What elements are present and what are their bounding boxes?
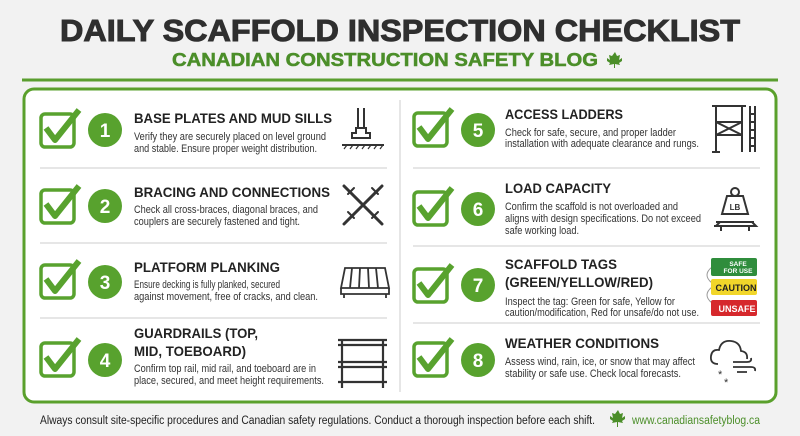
- item 5: 5: [473, 121, 484, 142]
- item 3: 3: [100, 273, 110, 294]
- item 6: safe working load.: [505, 225, 579, 237]
- item 1: BASE PLATES AND MUD SILLS: [134, 110, 332, 126]
- item 8: stability or safe use. Check local forecasts.: [505, 368, 681, 380]
- item 2: [41, 184, 382, 228]
- item 7: (GREEN/YELLOW/RED): [505, 274, 653, 290]
- item 5: Check for safe, secure, and proper ladder: [505, 127, 676, 139]
- item 8: *: [724, 377, 729, 389]
- item 3: against movement, free of cracks, and clean.: [134, 291, 318, 303]
- title: DAILY SCAFFOLD INSPECTION CHECKLIST: [60, 13, 740, 48]
- item 4: MID, TOEBOARD): [134, 343, 246, 359]
- item 7: 7: [473, 276, 483, 297]
- item 8: [414, 335, 755, 389]
- item 4: [41, 325, 387, 388]
- item 7: [414, 256, 757, 319]
- item 8: WEATHER CONDITIONS: [505, 335, 659, 351]
- item 6: [414, 180, 756, 237]
- footer url: www.canadiansafetyblog.ca: [631, 415, 761, 427]
- item 8: Assess wind, rain, ice, or snow that may affect: [505, 356, 695, 368]
- item 6: Confirm the scaffold is not overloaded and: [505, 201, 678, 213]
- item 7: Inspect the tag: Green for safe, Yellow for: [505, 296, 675, 308]
- item 1: and stable. Ensure proper weight distribution.: [134, 143, 317, 155]
- item 8: *: [718, 369, 723, 381]
- item 6: LOAD CAPACITY: [505, 180, 612, 196]
- item 2: 2: [100, 197, 110, 218]
- item 7: SCAFFOLD TAGS: [505, 256, 617, 272]
- item 4: GUARDRAILS (TOP,: [134, 325, 258, 341]
- item 3: PLATFORM PLANKING: [134, 259, 280, 275]
- item 4: Confirm top rail, mid rail, and toeboard are in: [134, 363, 316, 375]
- item 2: BRACING AND CONNECTIONS: [134, 184, 330, 200]
- item 3: [41, 259, 389, 303]
- footer url: [610, 410, 761, 427]
- item 2: Check all cross-braces, diagonal braces, and: [134, 204, 318, 216]
- icon: tags: [707, 258, 757, 316]
- item 5: installation with adequate clearance and rungs.: [505, 138, 699, 150]
- icon: tags: UNSAFE: [718, 304, 756, 314]
- item 4: place, secured, and meet height requirements.: [134, 375, 324, 387]
- item 5: [414, 106, 755, 152]
- icon: tags: FOR USE: [724, 268, 753, 275]
- item 5: ACCESS LADDERS: [505, 106, 623, 122]
- item 1: 1: [100, 121, 111, 142]
- icon: tags: CAUTION: [716, 283, 756, 293]
- subtitle: CANADIAN CONSTRUCTION SAFETY BLOG: [172, 50, 598, 70]
- item 2: couplers are securely fastened and tight.: [134, 216, 300, 228]
- item 6: LB: [730, 203, 741, 212]
- item 1: Verify they are securely placed on level ground: [134, 131, 326, 143]
- item 8: 8: [473, 351, 483, 372]
- footer note: Always consult site-specific procedures and Canadian safety regulations. Conduct a thorough inspection before each shift.: [40, 415, 595, 427]
- item 6: aligns with design specifications. Do not exceed: [505, 213, 701, 225]
- icon: tags: SAFE: [729, 261, 747, 268]
- item 7: caution/modification, Red for unsafe/do not use.: [505, 307, 699, 319]
- item 3: Ensure decking is fully planked, secured: [134, 279, 280, 291]
- panel: checklist: [24, 89, 776, 402]
- item 6: 6: [473, 200, 483, 221]
- item 1: [41, 108, 384, 155]
- item 4: 4: [100, 351, 111, 372]
